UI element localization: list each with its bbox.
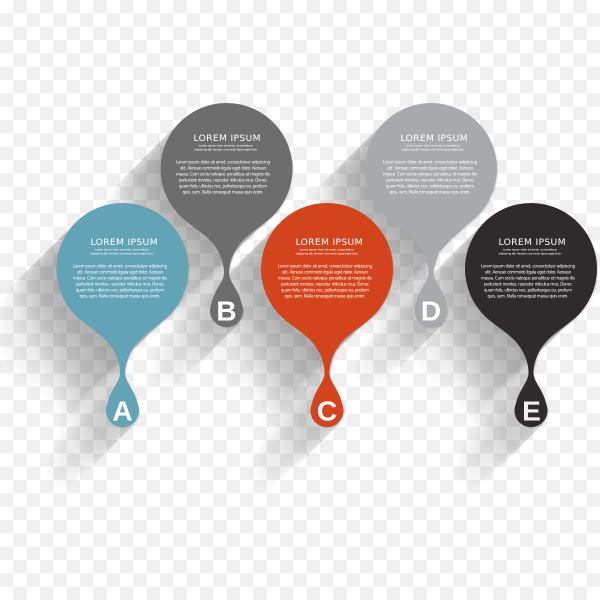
subheading C: adipiscing elit. Aenean commodo ligula eget dolor. xyxy=(296,252,359,256)
body text D xyxy=(383,160,477,194)
body text D: massa. Cum sociis natoque penatibus et magnis dis xyxy=(383,172,477,176)
body text E: quis, sem. Nulla consequat massa quis enim. xyxy=(488,294,568,298)
letter C: C xyxy=(317,396,337,426)
drop shape E xyxy=(465,203,597,427)
heading E: LOREM IPSUM xyxy=(498,237,566,248)
letter E: E xyxy=(522,396,541,426)
body text A: quis, sem. Nulla consequat massa quis enim. xyxy=(80,294,160,298)
drop shape B xyxy=(160,103,292,327)
heading B: LOREM IPSUM xyxy=(194,133,261,144)
letter D: D xyxy=(421,296,441,326)
subheading E: Lorem ipsum dolor sit amet, consectetuer xyxy=(503,248,558,252)
panel: drop C xyxy=(261,203,393,427)
panel: drop E xyxy=(465,203,597,427)
letter B: B xyxy=(216,296,237,326)
letter A: A xyxy=(112,396,133,426)
heading C: LOREM IPSUM xyxy=(296,237,363,248)
body text B: Lorem ipsum dolor sit amet, consectetuer adipiscing xyxy=(176,160,270,164)
body text B: parturient montes, nascetur ridiculus mus. Donec xyxy=(179,178,267,182)
body text D: quam felis, ultricies nec, pellentesque eu, pretium xyxy=(386,184,474,188)
body text B: massa. Cum sociis natoque penatibus et magnis dis xyxy=(176,172,270,176)
body text D: elit. Aenean commodo ligula eget dolor. Aenean xyxy=(387,166,473,170)
body text E: quam felis, ultricies nec, pellentesque eu, pretium xyxy=(484,288,572,292)
body text A: massa. Cum sociis natoque penatibus et magnis dis xyxy=(73,276,167,280)
subheading B xyxy=(194,144,258,152)
panel: drop A xyxy=(57,203,189,427)
subheading B: adipiscing elit. Aenean commodo ligula eget dolor. xyxy=(194,148,258,152)
drop shape C xyxy=(261,203,393,427)
body text B: elit. Aenean commodo ligula eget dolor. Aenean xyxy=(180,166,266,170)
panel: drop D xyxy=(365,103,497,327)
body text A: parturient montes, nascetur ridiculus mus. Donec xyxy=(76,282,164,286)
long diagonal shadows xyxy=(0,104,598,488)
subheading E xyxy=(498,248,562,256)
body text C: parturient montes, nascetur ridiculus mus. Donec xyxy=(281,282,369,286)
heading D: LOREM IPSUM xyxy=(400,133,468,144)
panel: drop B xyxy=(160,103,292,327)
body text D: parturient montes, nascetur ridiculus mus. Donec xyxy=(386,178,474,182)
body text E xyxy=(481,264,575,298)
subheading D: adipiscing elit. Aenean commodo ligula eget dolor. xyxy=(402,148,465,152)
body text E: Lorem ipsum dolor sit amet, consectetuer adipiscing xyxy=(481,264,575,268)
subheading C xyxy=(296,248,359,256)
subheading A: adipiscing elit. Aenean commodo ligula eget dolor. xyxy=(90,252,154,256)
subheading A: Lorem ipsum dolor sit amet, consectetuer xyxy=(95,248,150,252)
body text C: quam felis, ultricies nec, pellentesque eu, pretium xyxy=(281,288,369,292)
body text C: quis, sem. Nulla consequat massa quis enim. xyxy=(284,294,366,298)
body text C: Lorem ipsum dolor sit amet, consectetuer adipiscing xyxy=(278,264,372,268)
body text A: Lorem ipsum dolor sit amet, consectetuer adipiscing xyxy=(73,264,167,268)
body text A: quam felis, ultricies nec, pellentesque eu, pretium xyxy=(76,288,164,292)
subheading C: Lorem ipsum dolor sit amet, consectetuer xyxy=(300,248,355,252)
drop shape D xyxy=(365,103,497,327)
body text E: massa. Cum sociis natoque penatibus et magnis dis xyxy=(481,276,575,280)
body text E: elit. Aenean commodo ligula eget dolor. Aenean xyxy=(485,270,571,274)
body text A: elit. Aenean commodo ligula eget dolor. Aenean xyxy=(77,270,163,274)
drop shape A xyxy=(57,203,189,427)
body text C xyxy=(278,264,372,298)
subheading E: adipiscing elit. Aenean commodo ligula eget dolor. xyxy=(498,252,562,256)
body text B xyxy=(176,160,270,194)
body text B: quam felis, ultricies nec, pellentesque eu, pretium xyxy=(179,184,267,188)
heading A: LOREM IPSUM xyxy=(90,237,158,248)
body text B: quis, sem. Nulla consequat massa quis enim. xyxy=(182,190,264,194)
subheading B: Lorem ipsum dolor sit amet, consectetuer xyxy=(199,144,254,148)
body text C: elit. Aenean commodo ligula eget dolor. Aenean xyxy=(282,270,368,274)
subheading A xyxy=(90,248,154,256)
body text E: parturient montes, nascetur ridiculus mus. Donec xyxy=(484,282,572,286)
body text D: Lorem ipsum dolor sit amet, consectetuer adipiscing xyxy=(383,160,477,164)
body text D: quis, sem. Nulla consequat massa quis enim. xyxy=(390,190,470,194)
body text A xyxy=(73,264,167,298)
subheading D: Lorem ipsum dolor sit amet, consectetuer xyxy=(406,144,461,148)
body text C: massa. Cum sociis natoque penatibus et magnis dis xyxy=(278,276,372,280)
subheading D xyxy=(402,144,465,152)
